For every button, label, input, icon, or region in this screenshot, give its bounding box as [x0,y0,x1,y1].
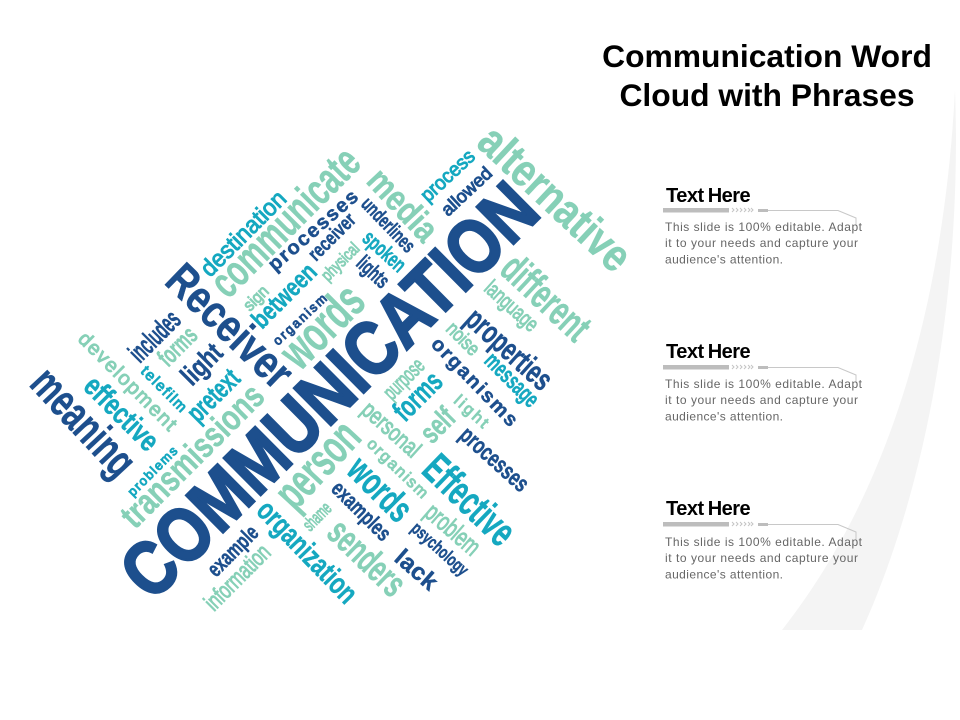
word cloud: problems [125,443,181,499]
text block 2: Text Here [666,341,751,363]
text block 1: it to your needs and capture your [665,236,858,250]
text block 1: This slide is 100% editable. Adapt [665,220,863,234]
word cloud: senders [319,511,414,605]
word cloud: between [245,256,323,334]
word cloud: noise [441,318,484,360]
word cloud: alternative [468,114,643,282]
text block 2: This slide is 100% editable. Adapt [665,377,863,391]
word cloud: physical [317,239,363,285]
text block 2: audience's attention. [665,410,783,424]
word cloud: destination [195,185,292,282]
text block 2 [663,341,863,424]
word cloud: media [359,159,448,250]
text block 3: it to your needs and capture your [665,551,858,565]
word cloud: information [199,539,276,616]
word cloud: COMMUNICATION [104,166,555,615]
word cloud: problem [419,497,487,562]
word cloud: processes [264,186,363,276]
word cloud: light [450,392,492,432]
text block 3: audience's attention. [665,568,783,582]
word cloud: psychology [407,518,473,580]
word cloud: meaning [21,356,147,487]
word cloud: self [414,401,463,450]
background swoosh [782,90,956,630]
word cloud: forms [387,365,450,428]
word cloud: Receiver [156,253,304,399]
word cloud: communicate [200,137,370,307]
word cloud: properties [458,300,560,397]
word cloud: purpose [378,353,429,405]
word cloud: includes [122,304,187,368]
word cloud: words [268,272,376,380]
text block 1: audience's attention. [665,252,783,266]
word cloud: shame [299,498,335,535]
word cloud: example [202,520,263,582]
word cloud: pretext [180,362,246,428]
word cloud: forms [151,320,203,372]
word cloud: lights [352,250,395,293]
word cloud: lack [389,544,443,596]
text block 3: Text Here [666,498,751,520]
word cloud: light [174,337,229,391]
text block 1: Text Here [666,185,751,207]
word cloud: development [73,328,181,436]
title: Cloud with Phrases [619,77,915,113]
word cloud: effective [77,370,165,458]
word cloud: language [480,275,544,337]
word cloud: receiver [304,209,361,266]
word cloud: message [479,347,545,413]
text block 2: it to your needs and capture your [665,393,858,407]
word cloud: process [416,146,480,207]
word cloud: organism [270,291,330,348]
word cloud: telefilm [137,363,190,416]
word cloud: processes [454,421,534,498]
word cloud: transmissions [112,375,272,536]
text block 3 [663,498,863,582]
word cloud: examples [326,476,396,546]
word cloud: different [492,244,601,350]
word cloud: Effective [414,445,526,555]
word cloud: personal [356,396,426,463]
word cloud: organism [363,436,431,502]
text block 1 [663,185,863,266]
title: Communication Word [602,38,932,74]
text block 3: This slide is 100% editable. Adapt [665,535,863,549]
word cloud: person [264,410,371,520]
word cloud: organisms [426,333,522,431]
word cloud: spoken [358,225,412,277]
word cloud: organization [250,494,364,610]
word cloud: sign [239,282,273,315]
title [602,38,932,113]
word cloud: underlines [356,193,419,257]
word cloud: allowed [437,163,496,220]
word cloud: words [338,448,421,531]
